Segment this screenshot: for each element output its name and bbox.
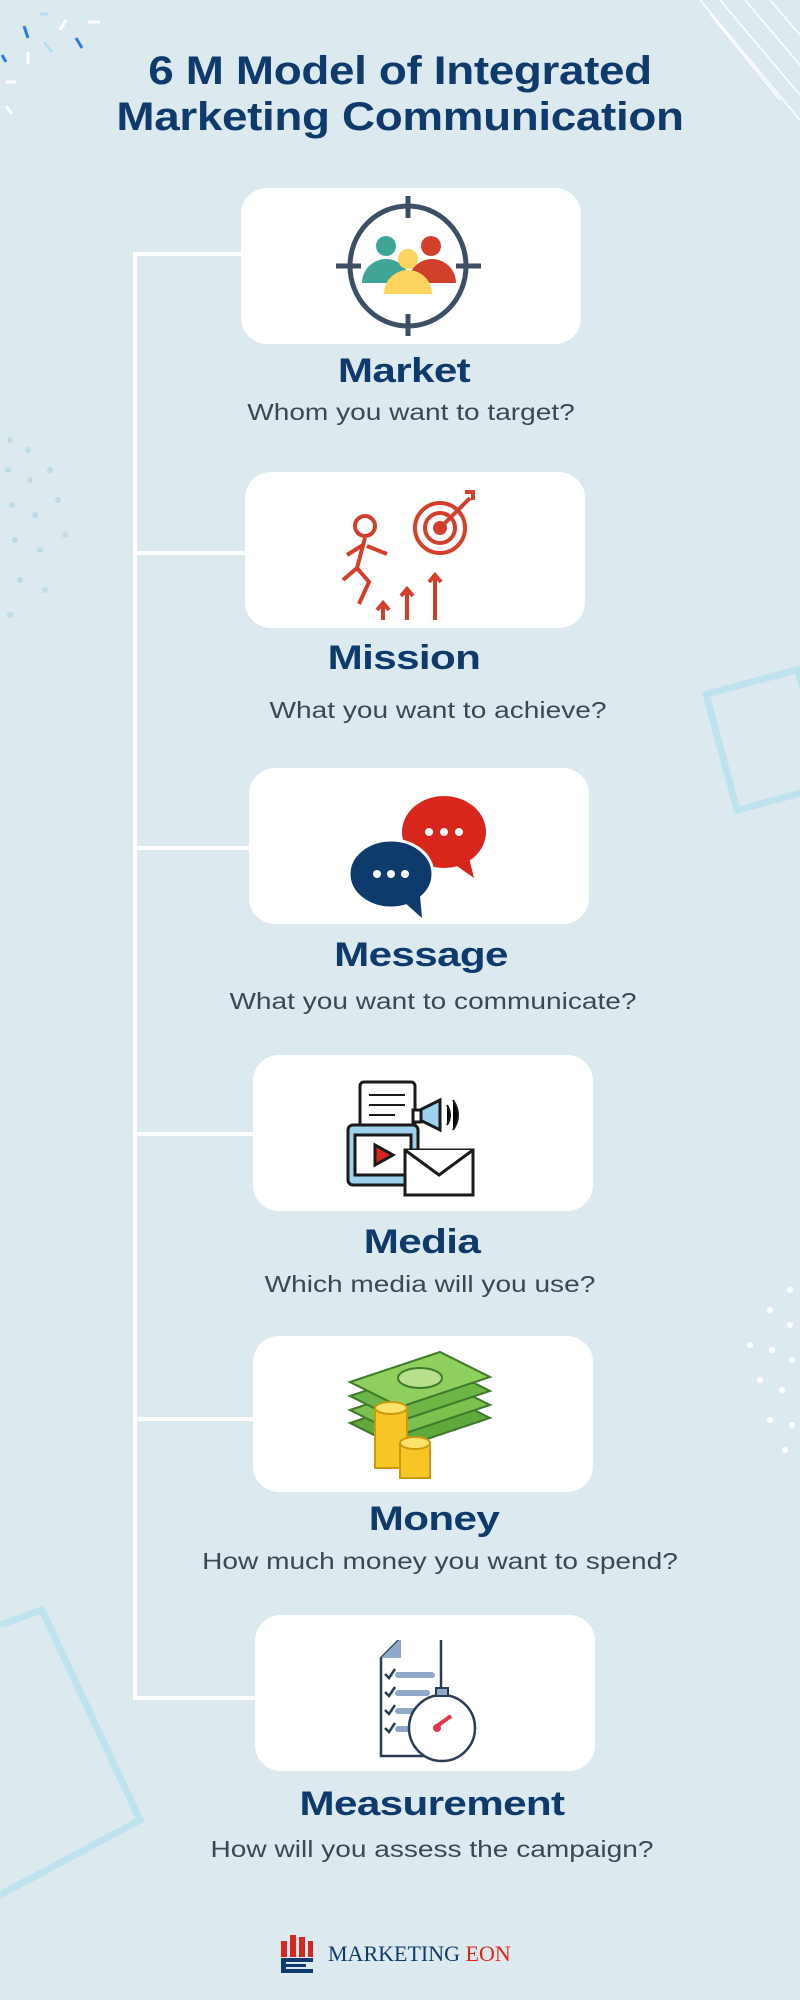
- title: [116, 49, 684, 139]
- heading: money: Money: [369, 1500, 499, 1538]
- icon: runner and target: [342, 490, 475, 620]
- panel: message: [249, 768, 589, 924]
- icon: target people: [336, 196, 481, 336]
- icon: checklist and stopwatch: [380, 1640, 476, 1762]
- panel: market: [241, 188, 581, 344]
- text: measurement: How will you assess the campaign?: [211, 1836, 653, 1862]
- title: Marketing Communication: [116, 95, 684, 139]
- icon: chat bubbles: [350, 796, 486, 918]
- title: 6 M Model of Integrated: [148, 49, 652, 93]
- text: media: Which media will you use?: [265, 1271, 595, 1297]
- text: money: How much money you want to spend?: [202, 1548, 678, 1574]
- heading: mission: Mission: [328, 639, 480, 677]
- panel: media: [253, 1055, 593, 1211]
- logo: marketing eon: MARKETING EON: [328, 1941, 511, 1966]
- logo: marketing eon: [281, 1935, 511, 1973]
- text: mission: What you want to achieve?: [270, 697, 606, 723]
- icon: cash and coins: [348, 1350, 492, 1479]
- heading: measurement: Measurement: [299, 1785, 564, 1823]
- panel: money: [253, 1336, 593, 1492]
- connector tree: [133, 252, 255, 1700]
- heading: message: Message: [334, 936, 508, 974]
- panel: mission: [245, 472, 585, 628]
- icon: media collage: [346, 1080, 474, 1196]
- heading: market: Market: [338, 352, 470, 390]
- text: market: Whom you want to target?: [247, 399, 575, 425]
- heading: media: Media: [364, 1223, 480, 1261]
- text: message: What you want to communicate?: [229, 988, 637, 1014]
- panel: measurement: [255, 1615, 595, 1771]
